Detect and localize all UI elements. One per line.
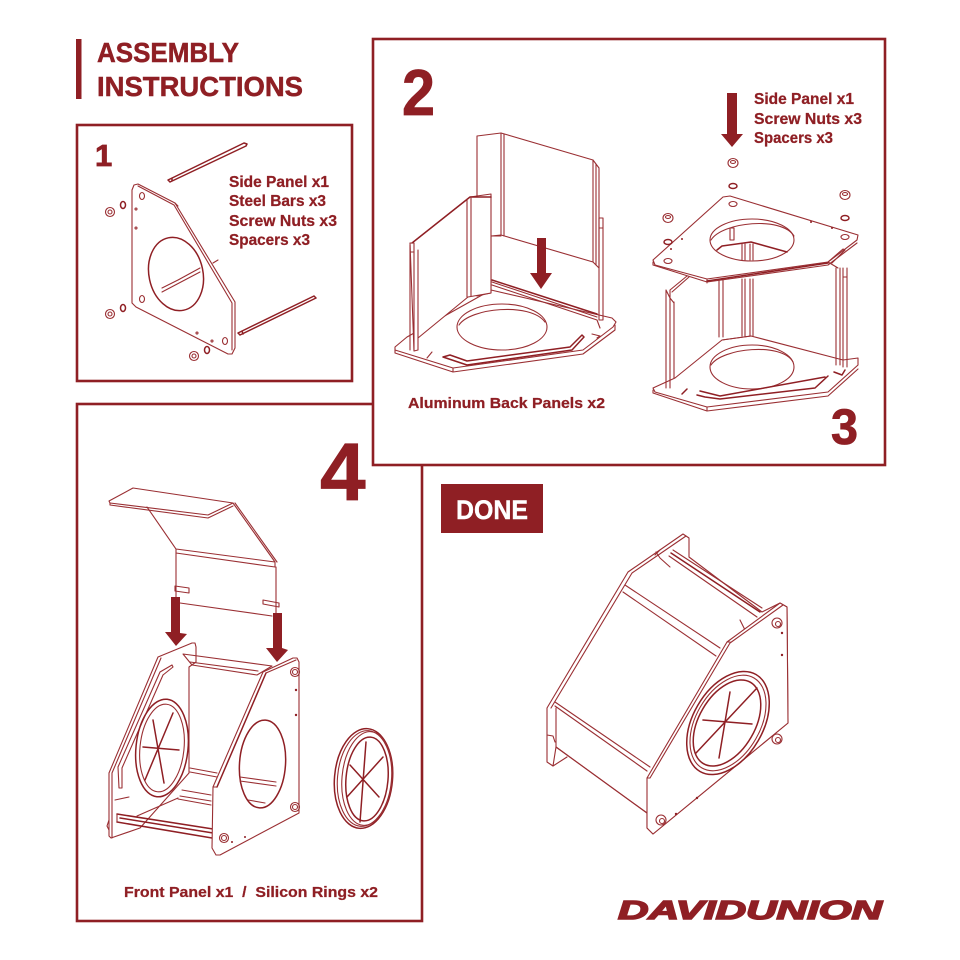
parts list: step 1: Spacers x3 <box>229 232 310 249</box>
step number 3: 3 <box>831 399 858 455</box>
step number 2: 2 <box>402 56 435 129</box>
parts list: step 3 <box>754 91 862 147</box>
title block <box>76 37 303 102</box>
parts list: step 1: Screw Nuts x3 <box>229 213 337 230</box>
panel: step 1 <box>77 125 352 381</box>
arrow: right <box>266 613 288 662</box>
panel: step 4 <box>77 404 422 921</box>
step number 1: 1 <box>95 138 112 173</box>
done badge <box>441 484 543 533</box>
done badge: DONE <box>456 495 528 525</box>
parts list: step 1: Side Panel x1 <box>229 174 329 191</box>
parts list: step 1 <box>229 174 337 249</box>
title block: ASSEMBLY <box>97 37 239 68</box>
caption: step 2: Aluminum Back Panels x2 <box>408 395 605 412</box>
parts list: step 3: Side Panel x1 <box>754 91 854 108</box>
parts list: step 1: Steel Bars x3 <box>229 193 326 210</box>
drawing: front panel lowered into frame <box>107 488 397 855</box>
caption: step 4: Front Panel x1 / Silicon Rings x2 <box>124 884 378 901</box>
arrow: left <box>165 597 187 646</box>
right side panel <box>212 658 300 855</box>
parts list: step 3: Screw Nuts x3 <box>754 111 862 128</box>
panel: steps 2 and 3 <box>373 39 885 465</box>
left side panel <box>109 643 196 838</box>
drawing: step 2 back panels on base <box>395 133 616 372</box>
arrow: step 3 <box>721 93 743 147</box>
title block: INSTRUCTIONS <box>97 71 303 102</box>
ring on finished enclosure <box>670 657 786 789</box>
silicon ring <box>330 726 397 831</box>
step number 4: 4 <box>320 427 366 518</box>
drawing: side panel with bars and nuts <box>106 143 316 360</box>
drawing: finished enclosure <box>547 534 788 834</box>
logo: DAVIDUNION <box>618 895 884 925</box>
drawing: step 3 assembled frame with top panel <box>653 158 858 411</box>
parts list: step 3: Spacers x3 <box>754 130 833 147</box>
back and base bars <box>107 654 272 838</box>
arrow: step 2 <box>530 238 552 289</box>
